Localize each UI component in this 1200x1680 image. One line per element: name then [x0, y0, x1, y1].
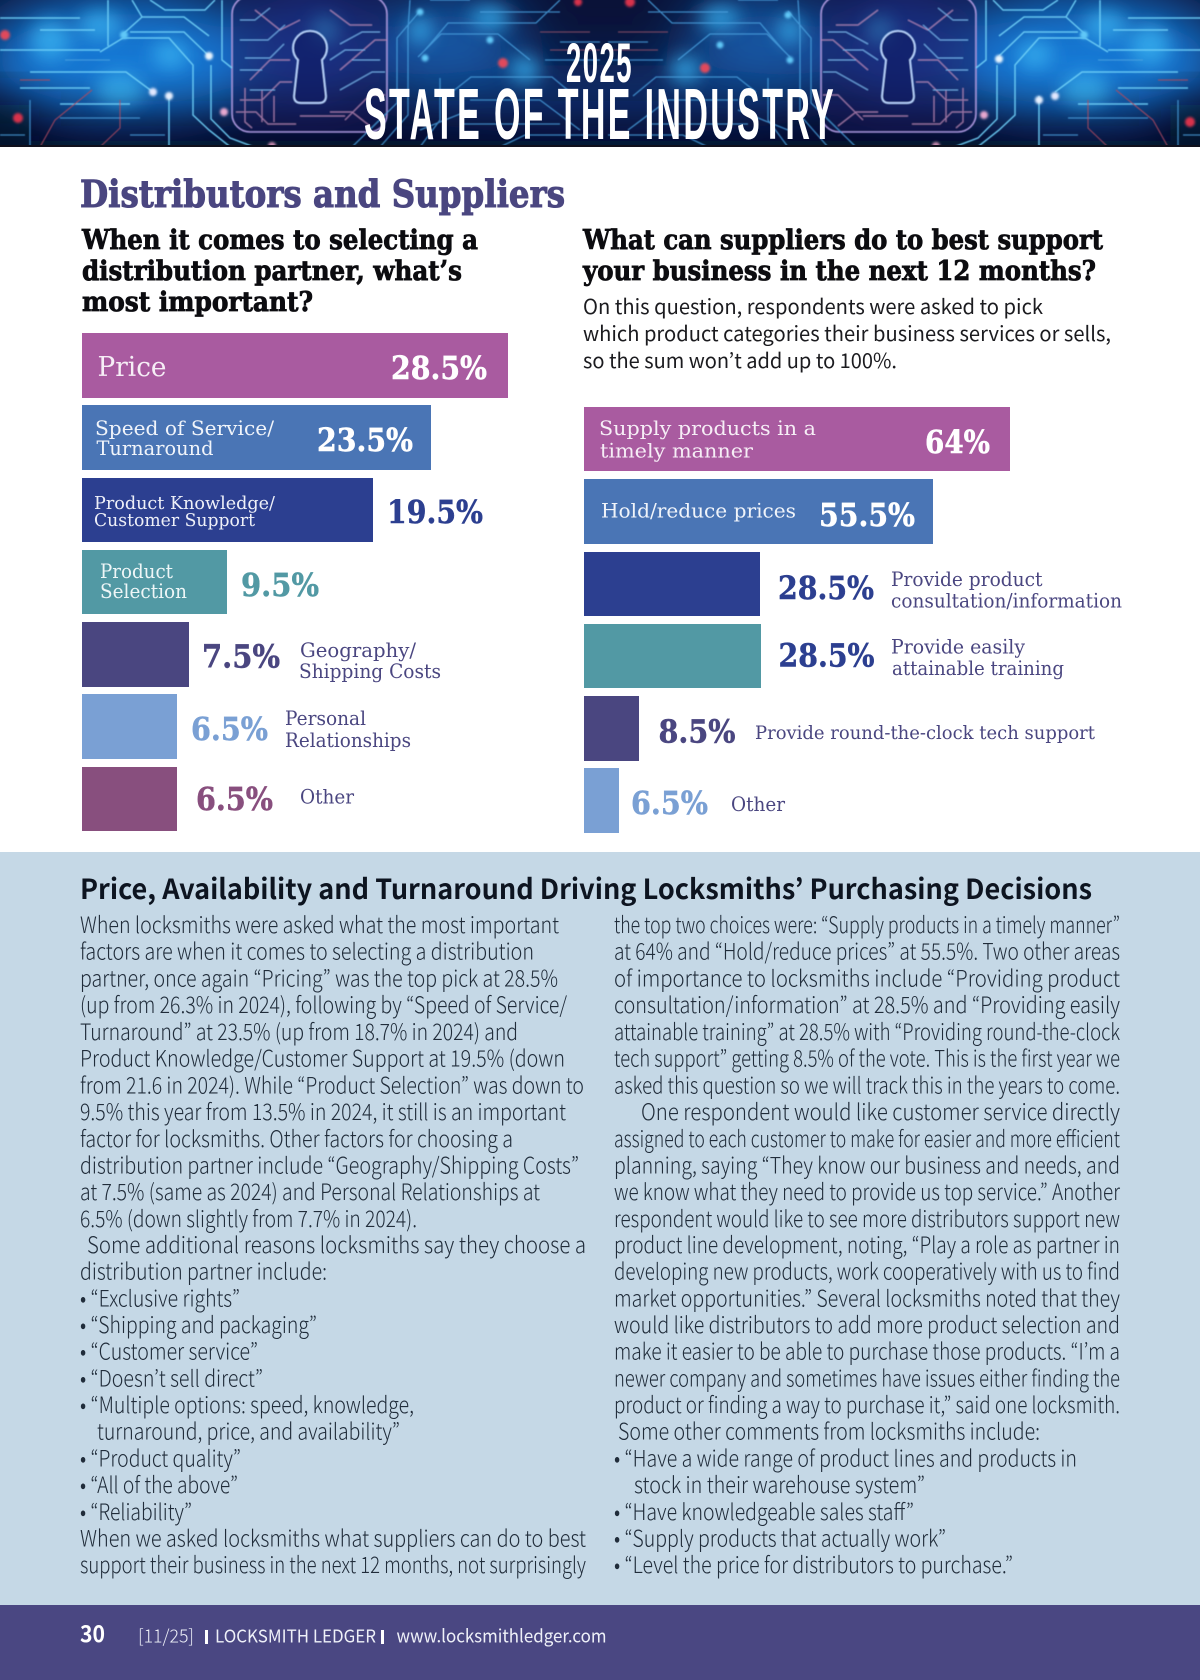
issue date: [11/25]	[138, 1622, 194, 1648]
bar: price 28.5%: 28.5%	[391, 349, 487, 387]
bar: personal relationships 6.5%: Relationships	[285, 728, 411, 752]
text block: article left column: 9.5% this year from 13.5% in 2024, it still is an important	[80, 1095, 566, 1127]
text block: article right column: market opportunities.” Several locksmiths noted that they	[614, 1281, 1120, 1313]
text block: article left column: factors are when it comes to selecting a distribution	[80, 935, 534, 967]
text block: article left column: from 21.6 in 2024). While “Product Selection” was down to	[80, 1068, 584, 1100]
text block: article left column: • “Reliability”	[80, 1495, 192, 1527]
text block: article right column: • “Supply products that actually work”	[614, 1522, 946, 1554]
bar: product selection 9.5%	[82, 550, 319, 614]
text block: article right column: would like distributors to add more product selection and	[614, 1308, 1120, 1340]
question: how suppliers can support: your business in the next 12 months?	[582, 256, 1096, 287]
text block: article left column: • “Product quality”	[80, 1441, 241, 1473]
bar: product selection 9.5%: Product	[100, 559, 173, 583]
text block: article right column: • “Have a wide range of product lines and products in	[614, 1441, 1077, 1473]
bar: tech support 8.5%: 8.5%	[658, 712, 736, 750]
text block: article left column: partner, once again “Pricing” was the top pick at 28.5%	[80, 961, 558, 993]
text block: article left column: Some additional reasons locksmiths say they choose a	[87, 1228, 586, 1260]
text block: article right column: product or finding a way to purchase it,” said one locksmith.	[614, 1388, 1120, 1420]
panel: article background	[0, 852, 1200, 1605]
question: selecting a distribution partner	[81, 225, 478, 318]
publication name: LOCKSMITH LEDGER	[215, 1622, 376, 1648]
bar: hold prices 55.5%: Hold/reduce prices	[601, 498, 796, 522]
text block: article left column: • “Exclusive rights”	[80, 1281, 240, 1313]
text block: article right column	[614, 908, 1121, 1580]
text block: article right column: • “Level the price for distributors to purchase.”	[614, 1548, 1013, 1580]
text block: article right column: at 64% and “Hold/reduce prices” at 55.5%. Two other areas	[614, 935, 1120, 967]
bar: price 28.5%	[82, 333, 508, 398]
text block: article left column: turnaround, price, and availability”	[97, 1415, 400, 1447]
bar: supply products 64%: Supply products in a	[599, 416, 816, 440]
bar: other 6.5%: Other	[731, 792, 785, 816]
bar: speed of service 23.5%	[82, 405, 431, 470]
text block: article left column: distribution partner include “Geography/Shipping Costs”	[80, 1148, 579, 1180]
text: 2025	[566, 31, 633, 94]
bar: tech support 8.5%	[584, 696, 1095, 761]
page number: 30	[80, 1615, 105, 1649]
bar: product selection 9.5%: 9.5%	[241, 566, 319, 604]
bar: geography 7.5%	[82, 622, 441, 687]
bar: product selection 9.5%: Selection	[100, 579, 187, 603]
question: selecting a distribution partner: most important?	[82, 287, 313, 318]
text block: article right column: of importance to locksmiths include “Providing product	[614, 961, 1120, 993]
bar: speed of service 23.5%: Speed of Service/	[95, 416, 274, 440]
text block: article left column: 6.5% (down slightly from 7.7% in 2024).	[80, 1202, 417, 1234]
bar: geography 7.5%: 7.5%	[202, 638, 280, 676]
bar: product consultation 28.5%: consultation/information	[891, 588, 1122, 612]
bar: attainable training 28.5%: 28.5%	[778, 636, 874, 674]
question: selecting a distribution partner: When it comes to selecting a	[81, 225, 478, 256]
text block: article left column	[80, 908, 586, 1580]
bar: personal relationships 6.5%	[82, 694, 411, 759]
text block: article right column: we know what they need to provide us top service.” Another	[614, 1175, 1121, 1207]
bar: other 6.5%	[82, 767, 354, 831]
text block: survey note: so the sum won’t add up to 100%.	[583, 344, 897, 374]
bar: product knowledge 19.5%: Customer Support	[94, 510, 256, 531]
bar: product knowledge 19.5%	[82, 478, 483, 542]
bar: supply products 64%: 64%	[925, 423, 990, 461]
text block: article left column: When we asked locksmiths what suppliers can do to best	[80, 1522, 586, 1554]
text block: article left column: • “Multiple options: speed, knowledge,	[80, 1388, 414, 1420]
bar: hold prices 55.5%: 55.5%	[819, 496, 915, 534]
text block: article right column: planning, saying “They know our business and needs, and	[614, 1148, 1120, 1180]
bar: other 6.5%	[584, 768, 785, 833]
question: how suppliers can support: What can suppliers do to best support	[582, 225, 1103, 256]
bar chart: distribution partner factors	[82, 333, 508, 831]
text block: article left column: factor for locksmiths. Other factors for choosing a	[80, 1122, 513, 1154]
bar: product consultation 28.5%: Provide product	[891, 567, 1042, 591]
bar: other 6.5%: 6.5%	[631, 784, 708, 822]
text block: article left column: Product Knowledge/Customer Support at 19.5% (down	[80, 1042, 565, 1074]
bar: product knowledge 19.5%: 19.5%	[387, 493, 483, 531]
text block: article left column: When locksmiths were asked what the most important	[80, 908, 559, 940]
bar: product knowledge 19.5%: Product Knowledge/	[94, 493, 276, 514]
bar: product consultation 28.5%	[584, 552, 1122, 616]
bar: geography 7.5%: Geography/	[300, 638, 416, 662]
text block: survey note	[583, 290, 1111, 374]
bar: speed of service 23.5%: 23.5%	[317, 421, 413, 459]
text block: survey note: On this question, respondents were asked to pick	[583, 290, 1044, 320]
text block: article left column: at 7.5% (same as 2024) and Personal Relationships at	[80, 1175, 540, 1207]
circuit nodes	[0, 0, 1195, 150]
website: www.locksmithledger.com	[396, 1622, 606, 1648]
text block: article right column: • “Have knowledgeable sales staff”	[614, 1495, 914, 1527]
footer: page bar	[0, 1605, 1200, 1680]
bar: attainable training 28.5%: Provide easily	[891, 634, 1026, 658]
text block: article right column: stock in their warehouse system”	[634, 1468, 925, 1500]
text block: article right column: Some other comments from locksmiths include:	[618, 1415, 1040, 1447]
heading: article title: Price, Availability and Turnaround Driving Locksmiths’ Purchasing Decisions	[80, 868, 1092, 908]
question: how suppliers can support	[582, 225, 1103, 287]
bar: attainable training 28.5%: attainable training	[892, 656, 1064, 680]
text block: article left column: • “Customer service”	[80, 1335, 258, 1367]
banner: circuit board header image	[0, 0, 1200, 147]
text block: article right column: One respondent would like customer service directly	[641, 1095, 1120, 1127]
bar: product consultation 28.5%: 28.5%	[778, 569, 874, 607]
bar: hold prices 55.5%	[584, 479, 933, 544]
text block: article left column: • “Doesn’t sell direct”	[80, 1361, 263, 1393]
text block: article right column: make it easier to be able to purchase those products. “I’m a	[614, 1335, 1120, 1367]
bar: personal relationships 6.5%: Personal	[285, 706, 366, 730]
text block: article right column: product line development, noting, “Play a role as partner in	[614, 1228, 1120, 1260]
text block: article left column: • “Shipping and packaging”	[80, 1308, 317, 1340]
text block: article left column: distribution partner include:	[80, 1255, 327, 1287]
text block: article left column: Turnaround” at 23.5% (up from 18.7% in 2024) and	[80, 1015, 518, 1047]
text block: article left column: • “All of the above”	[80, 1468, 238, 1500]
bar: other 6.5%: 6.5%	[196, 780, 273, 818]
bar: tech support 8.5%: Provide round-the-clock tech support	[755, 722, 1095, 744]
bar: speed of service 23.5%: Turnaround	[96, 436, 214, 460]
bar: supply products 64%	[584, 407, 1010, 471]
bar: other 6.5%: Other	[300, 784, 354, 808]
bar: supply products 64%: timely manner	[600, 438, 753, 462]
question: selecting a distribution partner: distribution partner, what’s	[82, 256, 462, 287]
bar: price 28.5%: Price	[98, 352, 166, 383]
bar: personal relationships 6.5%: 6.5%	[191, 710, 268, 748]
bar: attainable training 28.5%	[584, 624, 1064, 688]
text block: article left column: support their business in the next 12 months, not surprisingly	[80, 1548, 586, 1580]
heading: distributors and suppliers: Distributors and Suppliers	[80, 172, 565, 216]
bar: geography 7.5%: Shipping Costs	[299, 659, 441, 683]
text block: article right column: consultation/information” at 28.5% and “Providing easily	[614, 988, 1120, 1020]
bar chart: supplier support	[584, 407, 1122, 833]
text block: article left column: (up from 26.3% in 2024), following by “Speed of Service/	[80, 988, 567, 1020]
text block: survey note: which product categories their business services or sells,	[583, 317, 1111, 347]
